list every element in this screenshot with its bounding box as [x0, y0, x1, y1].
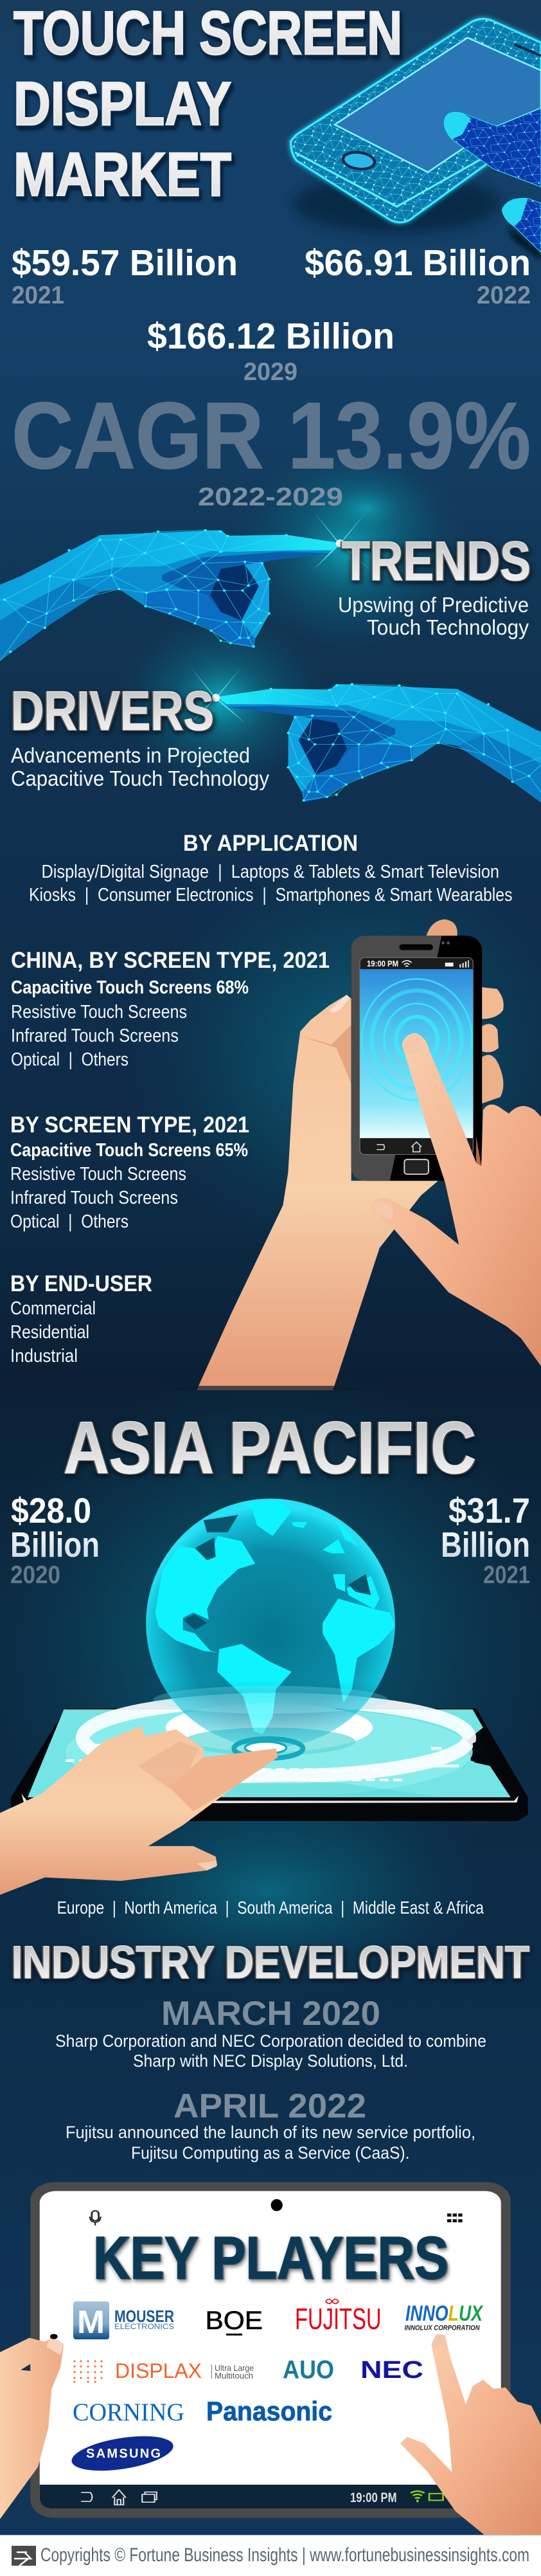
illustration: hands holding smartphone: 19:00 PM [367, 959, 398, 968]
illustration: trends mesh hand [0, 531, 340, 661]
logo: innolux: INNOLUX CORPORATION [405, 2324, 480, 2332]
segment: china by screen type [11, 948, 330, 1070]
stat: asia pacific 2020: Billion [10, 1525, 100, 1565]
title: DISPLAY [13, 69, 231, 138]
segment: by screen type [10, 1112, 249, 1232]
logo: mouser electronics: ELECTRONICS [114, 2322, 174, 2331]
stat: 2021 market size: $59.57 Billion [12, 242, 238, 284]
development: april 2022 [66, 2087, 475, 2163]
stat: 2022 market size: $66.91 Billion [305, 242, 531, 284]
development: april 2022: APRIL 2022 [173, 2087, 366, 2125]
segment: by end-user: BY END-USER [10, 1271, 152, 1296]
segment: by screen type: Capacitive Touch Screens 65% [10, 1140, 248, 1161]
drivers panel [11, 680, 269, 790]
segment: by application [29, 831, 513, 905]
icon: trends touch flare [313, 512, 369, 570]
trends panel [338, 531, 531, 639]
logo: mouser electronics [73, 2301, 174, 2340]
stat: asia pacific 2020 [10, 1491, 100, 1589]
stat: asia pacific 2021 [441, 1491, 530, 1589]
illustration: drivers mesh hand [217, 684, 541, 815]
development: march 2020: Sharp with NEC Display Solutions, Ltd. [133, 2051, 408, 2071]
title [13, 0, 402, 209]
segment: by end-user: Commercial [10, 1298, 96, 1319]
status bar clock: 19:00 PM [350, 2490, 397, 2505]
segment: by screen type: Optical | Others [10, 1211, 129, 1232]
segment: by screen type: Infrared Touch Screens [10, 1188, 178, 1208]
logo: mouser electronics: M [77, 2304, 105, 2340]
segment: china by screen type: CHINA, BY SCREEN TYPE, 2021 [11, 948, 330, 973]
title: TOUCH SCREEN [13, 0, 402, 68]
development: march 2020 [55, 1995, 486, 2071]
stat: 2021 market size [12, 242, 238, 309]
segment: by screen type: Resistive Touch Screens [10, 1164, 186, 1184]
development: march 2020: Sharp Corporation and NEC Corporation decided to combine [55, 2031, 486, 2051]
trends panel: Touch Technology [367, 615, 529, 639]
segment: by end-user: Residential [10, 1322, 89, 1343]
footer bar [0, 2535, 541, 2576]
development: march 2020: MARCH 2020 [161, 1995, 380, 2033]
stat: 2029 market size: $166.12 Billion [147, 316, 395, 357]
development: april 2022: Fujitsu announced the launch of its new service portfolio, [66, 2123, 475, 2142]
stat: CAGR: 2022-2029 [198, 483, 343, 511]
segment: by screen type: BY SCREEN TYPE, 2021 [10, 1112, 249, 1138]
heading: key players: KEY PLAYERS [93, 2224, 448, 2292]
footer logo [12, 2546, 36, 2566]
tablet frame [30, 2182, 511, 2518]
drivers panel: DRIVERS [11, 680, 214, 742]
illustration: hands on tablet [0, 2334, 541, 2535]
logo: displax: Multitouch [215, 2371, 253, 2381]
panel: key players tablet [30, 2182, 511, 2518]
logo: samsung: SAMSUNG [86, 2447, 161, 2461]
logo: boe: BOE [206, 2307, 263, 2335]
trends panel: Upswing of Predictive [338, 593, 529, 617]
drivers panel: Advancements in Projected [11, 743, 250, 767]
logo: innolux: INNOLUX [405, 2301, 484, 2326]
illustration: hands holding smartphone [169, 920, 541, 1390]
logo: nec: NEC [360, 2357, 423, 2384]
stat: 2022 market size: 2022 [477, 282, 531, 309]
segment: by end-user [10, 1271, 152, 1366]
stat: asia pacific 2020: 2020 [10, 1561, 60, 1589]
logo: displax: Ultra Large [215, 2363, 254, 2373]
stat: asia pacific 2021: $31.7 [448, 1491, 530, 1530]
icon: drivers touch flare [189, 667, 245, 725]
logo: mouser electronics: MOUSER [114, 2307, 174, 2326]
illustration: hologram globe over tablet with hand [0, 1498, 528, 1895]
development: april 2022: Fujitsu Computing as a Service (CaaS). [131, 2143, 410, 2163]
drivers panel: Capacitive Touch Technology [11, 766, 269, 790]
stat: asia pacific 2020: $28.0 [11, 1491, 91, 1530]
segment: by application: BY APPLICATION [183, 831, 358, 856]
stat: 2029 market size: 2029 [244, 358, 297, 386]
segment: china by screen type: Infrared Touch Screens [11, 1026, 179, 1046]
logo: samsung [69, 2430, 175, 2477]
stat: 2021 market size: 2021 [12, 282, 64, 309]
hero illustration: glowing mesh phone with fingertip [291, 19, 541, 259]
segment: china by screen type: Resistive Touch Screens [11, 1002, 187, 1022]
logo: corning: CORNING [73, 2399, 184, 2426]
logo: panasonic: Panasonic [206, 2396, 332, 2426]
region heading: asia pacific: ASIA PACIFIC [64, 1407, 476, 1489]
logo: fujitsu: FUJITSU [295, 2302, 382, 2336]
logo: displax [75, 2359, 254, 2382]
segment: china by screen type: Optical | Others [11, 1049, 129, 1070]
segment: by end-user: Industrial [10, 1346, 78, 1366]
logo: fujitsu [295, 2299, 382, 2336]
segment: china by screen type: Capacitive Touch Screens 68% [11, 977, 249, 998]
stat: asia pacific 2021: 2021 [483, 1561, 530, 1589]
stat: 2022 market size [305, 242, 531, 309]
logo: displax: DISPLAX [115, 2359, 202, 2382]
stat: 2029 market size [147, 316, 395, 386]
title: MARKET [13, 140, 231, 209]
logo: auo: AUO [283, 2356, 334, 2384]
